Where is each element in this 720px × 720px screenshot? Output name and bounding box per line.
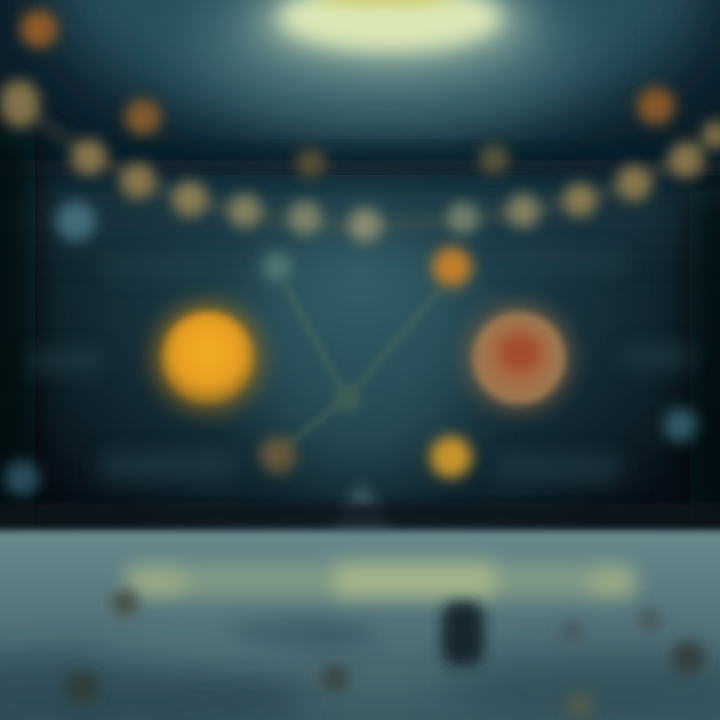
- corner shadows: [0, 130, 720, 530]
- floor light band: [125, 562, 635, 598]
- string of lights: [0, 80, 720, 242]
- floor objects: [65, 590, 705, 719]
- connector lines: [280, 285, 440, 450]
- left large orb: [152, 301, 264, 413]
- blue dots: [4, 201, 697, 496]
- upper orange lights: [20, 10, 675, 178]
- small triangle marker: [332, 482, 392, 525]
- panel: ceiling dome glow: [0, 0, 720, 245]
- floor panel: [0, 530, 720, 720]
- dark horizon: [0, 503, 720, 525]
- right large orb: [465, 304, 573, 412]
- wall background: [0, 0, 720, 530]
- faint text blocks: [30, 252, 690, 481]
- small orange orbs: [260, 247, 472, 478]
- ceiling light: [250, 0, 530, 72]
